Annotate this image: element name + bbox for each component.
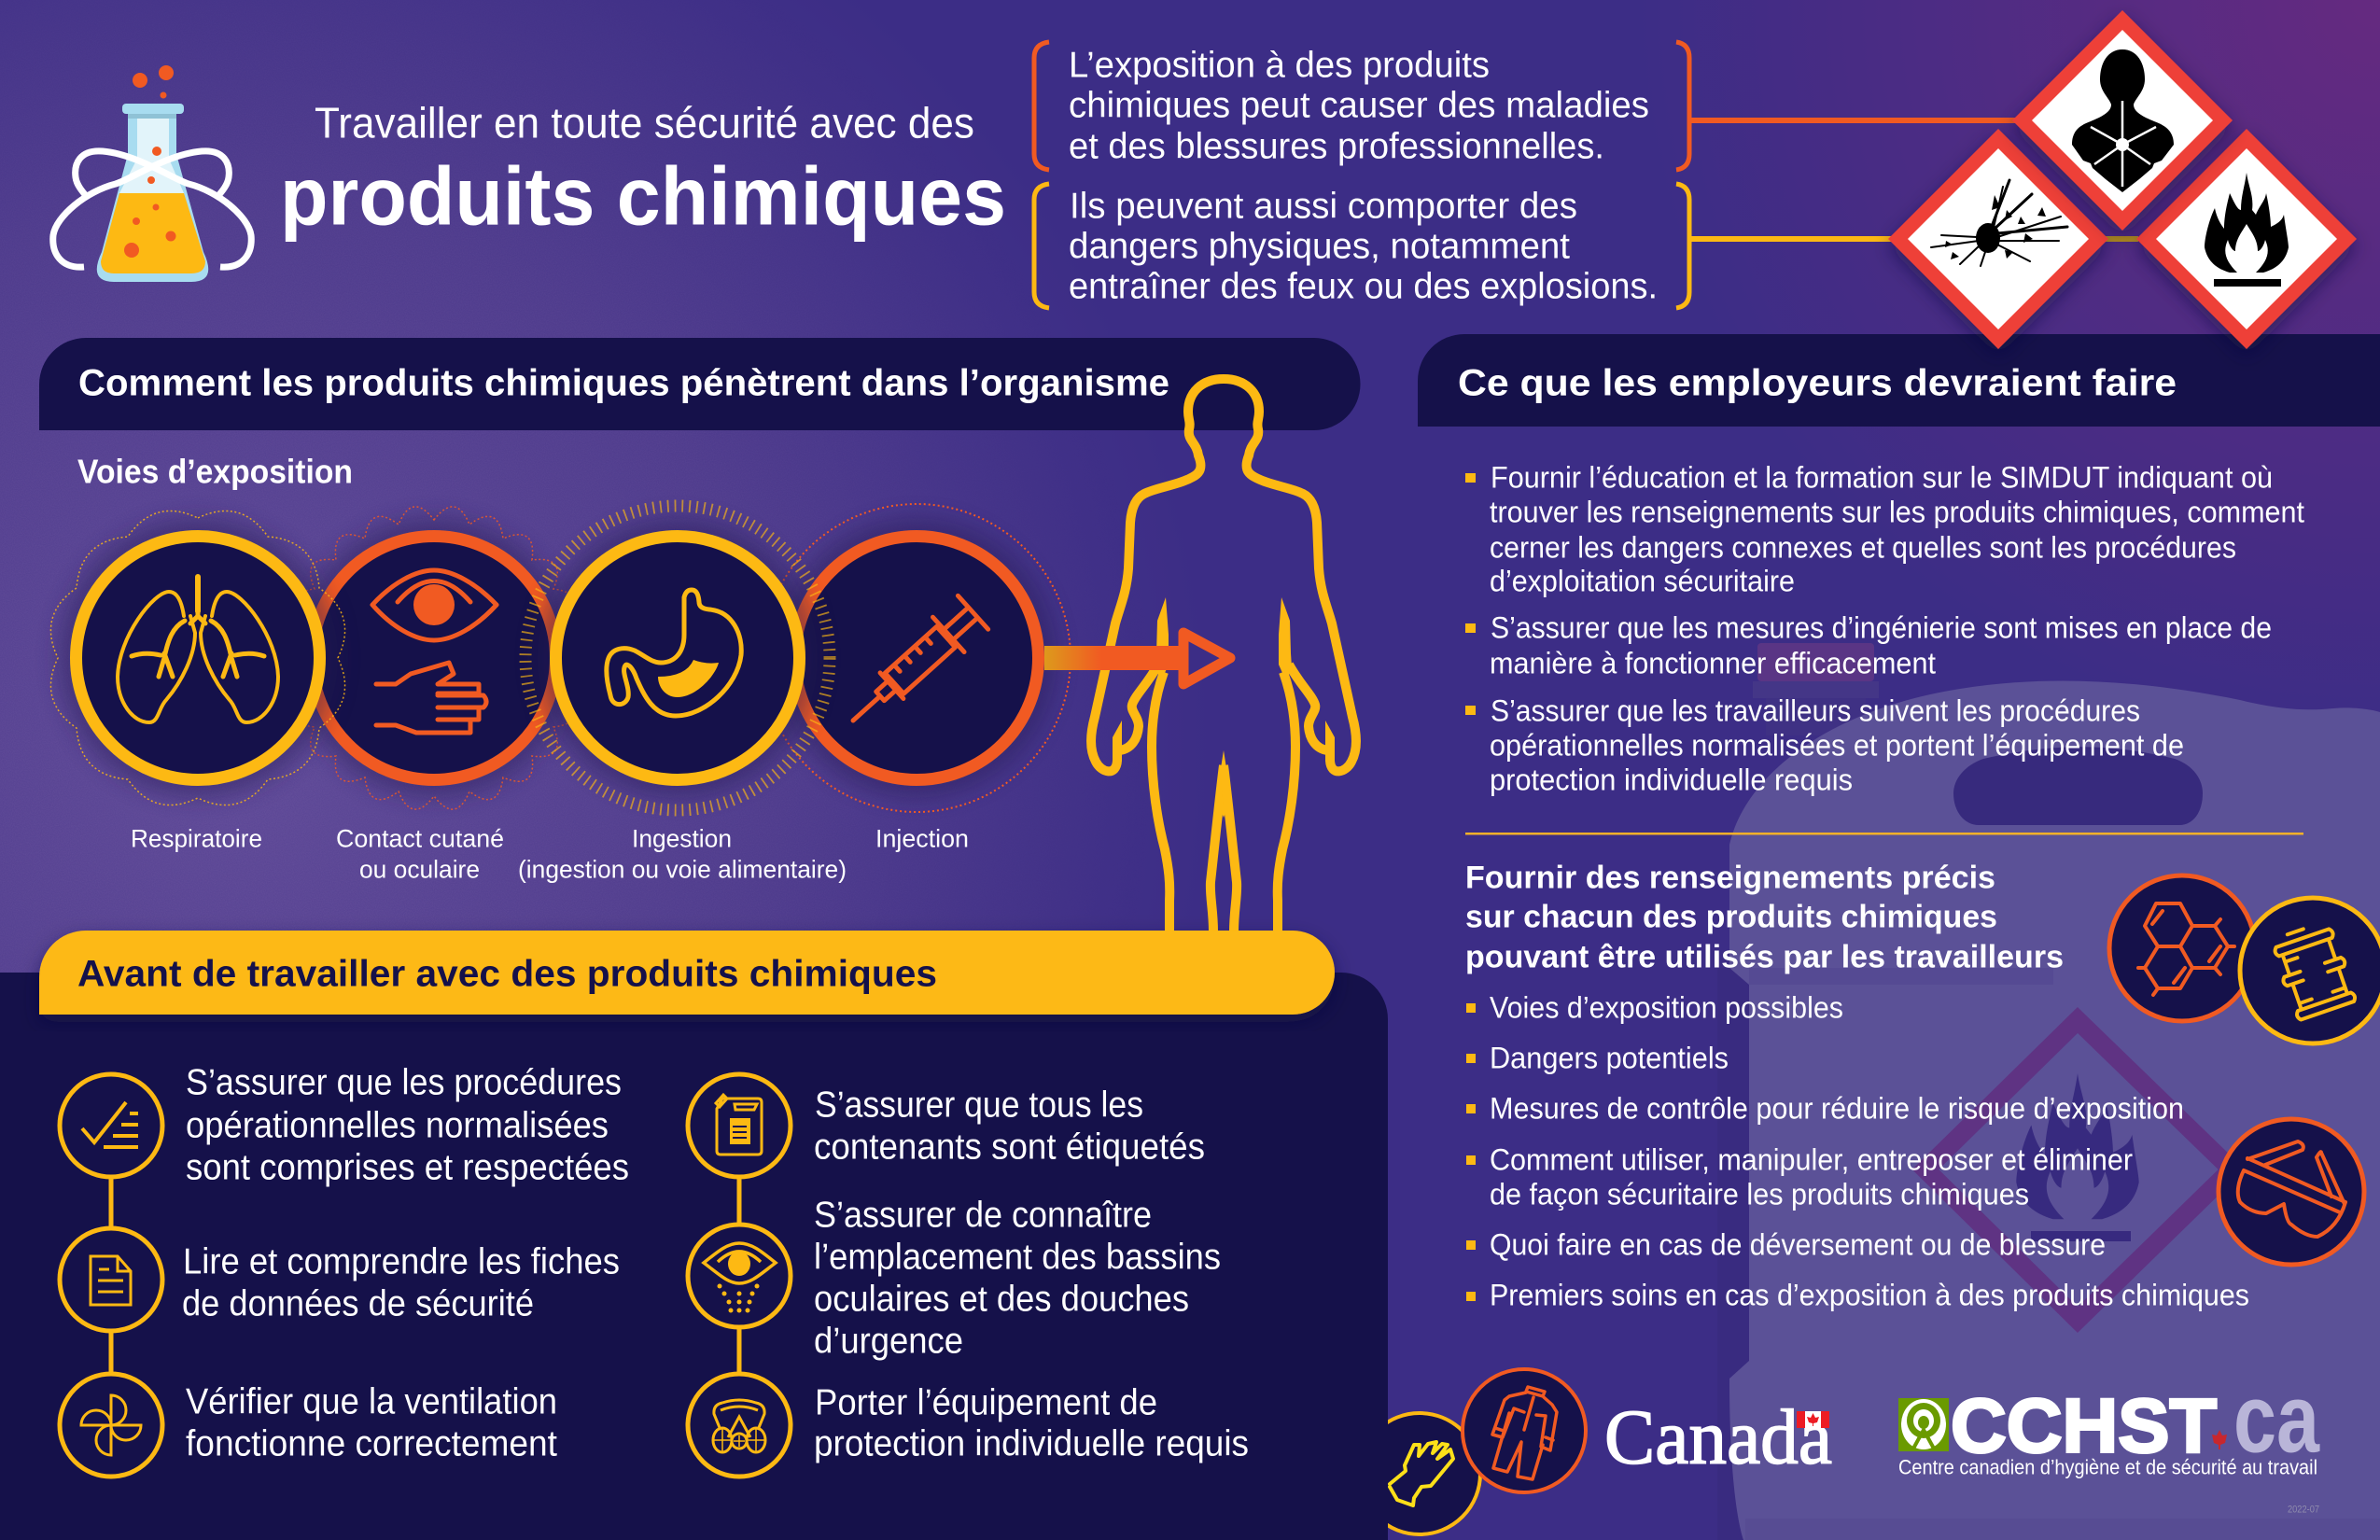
title: produits chimiques bbox=[280, 149, 1006, 243]
text: procedures bbox=[186, 1062, 629, 1187]
text: containers labelled bbox=[814, 1085, 1205, 1167]
callout: health hazards: chimiques peut causer des maladies bbox=[1069, 86, 1649, 125]
text: PPE bbox=[814, 1383, 1249, 1463]
callout: health hazards bbox=[1034, 42, 1689, 170]
icon: eye wash bbox=[688, 1225, 791, 1327]
icon: hazard flame bbox=[2136, 129, 2357, 349]
icon: lungs circle bbox=[50, 511, 345, 805]
icon: syringe circle bbox=[763, 504, 1071, 812]
logo: CCHST: Centre canadien d’hygiène et de sécurité au travail bbox=[1898, 1456, 2317, 1478]
heading bar: employers: Ce que les employeurs devraient faire bbox=[1458, 362, 2177, 403]
divider bbox=[1465, 833, 2303, 834]
heading bar: how chemicals enter the body: Comment les produits chimiques pénètrent dans l’organisme bbox=[78, 362, 1169, 403]
subheading: information: sur chacun des produits chimiques bbox=[1465, 900, 1997, 935]
heading: exposure routes: Voies d’exposition bbox=[77, 452, 353, 491]
bullet: engineering: manière à fonctionner efficacement bbox=[1490, 646, 1936, 679]
information list: Premiers soins en cas d’exposition à des produits chimiques bbox=[1490, 1279, 2249, 1312]
flask icon bbox=[53, 65, 251, 282]
background bbox=[0, 0, 2380, 973]
text: procedures: opérationnelles normalisées bbox=[186, 1105, 609, 1146]
subheading: information bbox=[1465, 861, 2064, 974]
connector lines bbox=[1689, 118, 2138, 242]
callout: physical hazards: dangers physiques, notamment bbox=[1069, 226, 1570, 267]
information list: Mesures de contrôle pour réduire le risque d’exposition bbox=[1490, 1092, 2184, 1126]
information list: de façon sécuritaire les produits chimiques bbox=[1490, 1178, 2029, 1211]
route labels: Contact cutané bbox=[336, 825, 504, 853]
text: safety data sheets bbox=[182, 1241, 620, 1323]
icon: skin and eye contact circle bbox=[283, 507, 585, 809]
title bbox=[280, 99, 1006, 243]
bullet: workers: S’assurer que les travailleurs suivent les procédures bbox=[1491, 694, 2140, 728]
route labels: (ingestion ou voie alimentaire) bbox=[518, 855, 847, 883]
route labels: ou oculaire bbox=[359, 855, 480, 883]
icon: ingestion stomach circle bbox=[525, 506, 830, 810]
bullet: workers bbox=[1465, 694, 2184, 797]
information list bbox=[1466, 991, 2249, 1312]
callout: physical hazards bbox=[1034, 184, 1689, 308]
icon: document bbox=[60, 1228, 162, 1331]
icon: respirator bbox=[688, 1374, 791, 1477]
text: PPE: protection individuelle requis bbox=[814, 1424, 1249, 1463]
heading bar: before working: Avant de travailler avec des produits chimiques bbox=[77, 954, 937, 995]
callout: health hazards: et des blessures professionnelles. bbox=[1069, 127, 1604, 166]
ghost hazard diamond bbox=[1925, 1020, 2232, 1320]
text: ventilation: fonctionne correctement bbox=[186, 1424, 557, 1463]
employers list bbox=[1465, 461, 2304, 797]
text: eye wash bbox=[814, 1195, 1221, 1361]
background jug silhouette bbox=[1717, 643, 2380, 1540]
subheading: information: Fournir des renseignements précis bbox=[1465, 861, 1995, 896]
icon: chemical structure bbox=[2109, 875, 2255, 1021]
icon: protective suit bbox=[1463, 1369, 1586, 1492]
icon: labelled container bbox=[688, 1074, 791, 1177]
route labels: Injection bbox=[875, 825, 969, 853]
text: safety data sheets: Lire et comprendre les fiches bbox=[183, 1241, 620, 1282]
heading bar: before working bbox=[39, 931, 1335, 1015]
text: procedures: sont comprises et respectées bbox=[186, 1148, 629, 1187]
bullet: engineering: S’assurer que les mesures d’ingénierie sont mises en place de bbox=[1491, 610, 2272, 644]
route labels: Ingestion bbox=[632, 825, 732, 853]
route labels bbox=[131, 825, 969, 883]
callout: health hazards: L’exposition à des produits bbox=[1069, 45, 1490, 86]
bullet: SIMDUT bbox=[1465, 461, 2304, 597]
bullet: SIMDUT: trouver les renseignements sur les produits chimiques, comment bbox=[1490, 495, 2304, 528]
callout: physical hazards: Ils peuvent aussi comporter des bbox=[1070, 187, 1577, 226]
logo: CCHST: CCHST bbox=[1951, 1383, 2217, 1469]
icon: hazard health bbox=[2012, 10, 2233, 231]
information list: Quoi faire en cas de déversement ou de blessure bbox=[1490, 1228, 2106, 1262]
connectors bbox=[108, 1176, 741, 1376]
text: ventilation bbox=[186, 1381, 557, 1463]
text: PPE: Porter l’équipement de bbox=[815, 1383, 1157, 1422]
body outline bbox=[1091, 379, 1356, 931]
information list: Voies d’exposition possibles bbox=[1490, 991, 1843, 1025]
icon: ventilation fan bbox=[60, 1374, 162, 1477]
bullet: workers: protection individuelle requis bbox=[1490, 763, 1853, 797]
heading bar: employers bbox=[1418, 334, 2380, 427]
logo: Canada wordmark: Canada bbox=[1604, 1394, 1832, 1480]
text: containers labelled: contenants sont étiquetés bbox=[814, 1127, 1205, 1167]
icon: hazard explosion bbox=[1888, 129, 2108, 349]
route labels: Respiratoire bbox=[131, 825, 262, 853]
arrow into body bbox=[1044, 633, 1230, 684]
icon: checklist bbox=[60, 1074, 162, 1177]
heading bar: how chemicals enter the body bbox=[39, 338, 1361, 430]
information list: Dangers potentiels bbox=[1490, 1042, 1729, 1075]
bullet: engineering bbox=[1465, 610, 2272, 679]
text: eye wash: S’assurer de connaître bbox=[814, 1195, 1152, 1236]
bullet: workers: opérationnelles normalisées et portent l’équipement de bbox=[1490, 728, 2184, 762]
icon: barrel bbox=[2240, 898, 2380, 1043]
text: ventilation: Vérifier que la ventilation bbox=[186, 1381, 557, 1422]
text: eye wash: oculaires et des douches bbox=[814, 1279, 1189, 1320]
bullet: SIMDUT: cerner les dangers connexes et quelles sont les procédures bbox=[1490, 530, 2236, 564]
bullet: SIMDUT: Fournir l’éducation et la formation sur le SIMDUT indiquant où bbox=[1491, 461, 2273, 495]
bullet: SIMDUT: d’exploitation sécuritaire bbox=[1490, 564, 1795, 597]
text: containers labelled: S’assurer que tous les bbox=[815, 1085, 1143, 1126]
information list: Comment utiliser, manipuler, entreposer et éliminer bbox=[1490, 1142, 2133, 1176]
icon: glove bbox=[1359, 1413, 1480, 1534]
text: procedures: S’assurer que les procédures bbox=[186, 1062, 622, 1103]
subheading: information: pouvant être utilisés par les travailleurs bbox=[1465, 939, 2064, 974]
icon: safety goggles bbox=[2219, 1119, 2364, 1265]
text: safety data sheets: de données de sécurité bbox=[182, 1284, 534, 1323]
logo: CCHST: ca bbox=[2233, 1365, 2320, 1473]
date stamp: 2022-07 bbox=[2288, 1505, 2319, 1516]
text: eye wash: d’urgence bbox=[814, 1322, 963, 1361]
text: eye wash: l’emplacement des bassins bbox=[814, 1238, 1221, 1277]
title: Travailler en toute sécurité avec des bbox=[315, 99, 974, 147]
panel: before working with chemicals bbox=[0, 931, 1388, 1540]
callout: physical hazards: entraîner des feux ou des explosions. bbox=[1069, 267, 1658, 306]
logo: CCHST bbox=[1898, 1365, 2320, 1478]
